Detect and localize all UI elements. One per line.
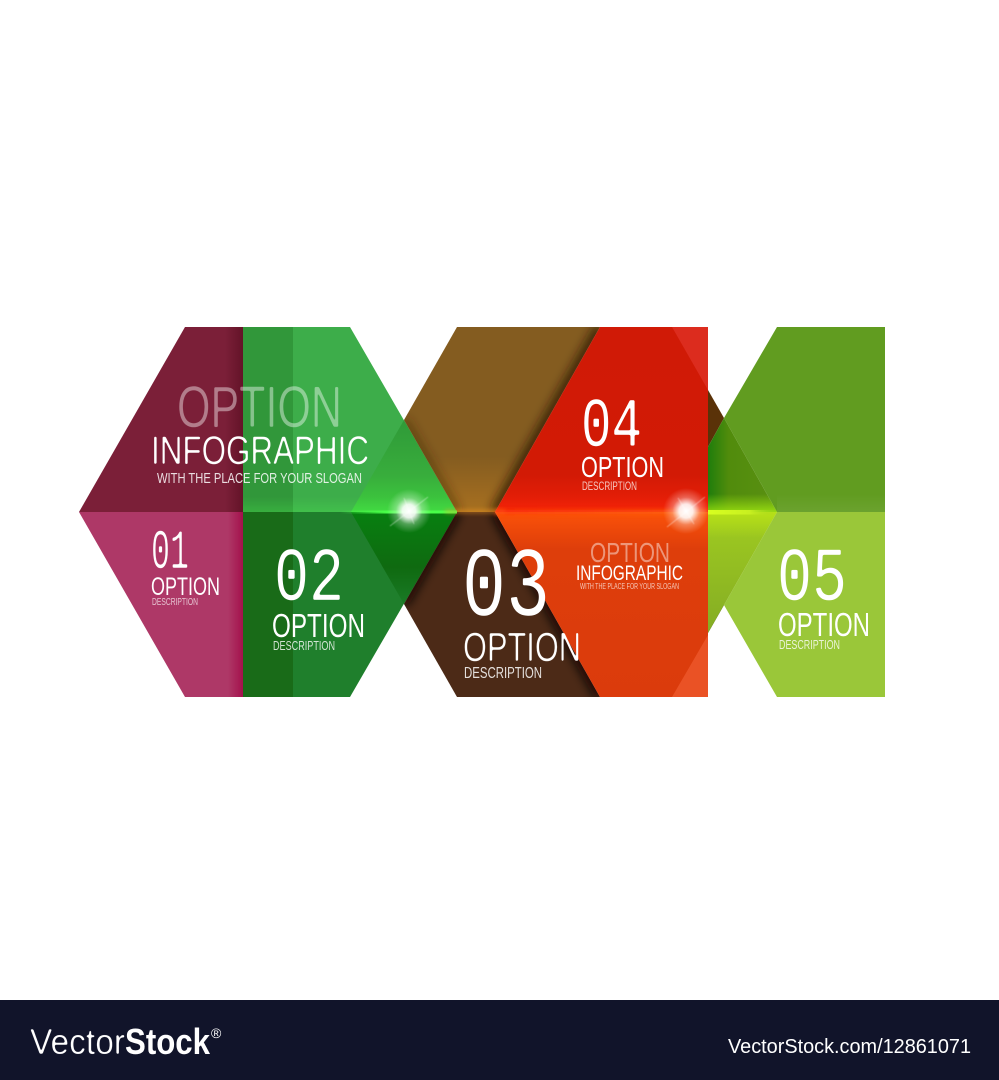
text block: small option infographic: OPTION: [590, 537, 670, 568]
text block: 03: DESCRIPTION: [464, 665, 542, 682]
text block: 04: 04: [581, 389, 642, 468]
footer bar: [0, 1000, 999, 1080]
text block: 02: 02: [274, 537, 344, 623]
text block: 01: DESCRIPTION: [152, 597, 198, 608]
light streak and sparkles: [243, 488, 777, 538]
text block: 01: 01: [151, 521, 189, 585]
title: option infographic: WITH THE PLACE FOR YOUR SLOGAN: [157, 470, 362, 487]
panel: hexagon 03 brown: [404, 327, 600, 697]
footer logo: ®: [211, 1025, 222, 1041]
text block: 04: DESCRIPTION: [582, 479, 637, 493]
footer logo: Vector: [30, 1021, 125, 1062]
footer logo: Stock: [125, 1021, 211, 1062]
text block: 01: OPTION: [151, 573, 220, 601]
footer image id: VectorStock.com/12861071: [728, 1036, 971, 1058]
title: option infographic: [151, 375, 369, 487]
text block: 04: OPTION: [581, 452, 664, 484]
text block: 05: DESCRIPTION: [779, 638, 840, 652]
text block: 02: DESCRIPTION: [273, 639, 335, 653]
text block: 05: 05: [777, 537, 847, 623]
title: option infographic: OPTION: [177, 375, 342, 440]
title: option infographic: INFOGRAPHIC: [151, 429, 369, 473]
text block: small option infographic: [576, 537, 683, 591]
text block: 02: OPTION: [272, 607, 365, 644]
text block: small option infographic: WITH THE PLACE FOR YOUR SLOGAN: [580, 582, 679, 591]
text block: 05: OPTION: [778, 606, 870, 643]
panel: hexagon 02 green: [243, 327, 457, 697]
text block: small option infographic: INFOGRAPHIC: [576, 562, 683, 585]
footer logo: [30, 1021, 222, 1062]
panel: hexagon 04 red orange: [495, 327, 724, 697]
panel: hexagon 05 green: [708, 327, 885, 697]
text block: 03: OPTION: [463, 624, 581, 670]
text block: 03: 03: [462, 534, 550, 645]
panel: hexagon 01 crimson: [79, 327, 243, 697]
